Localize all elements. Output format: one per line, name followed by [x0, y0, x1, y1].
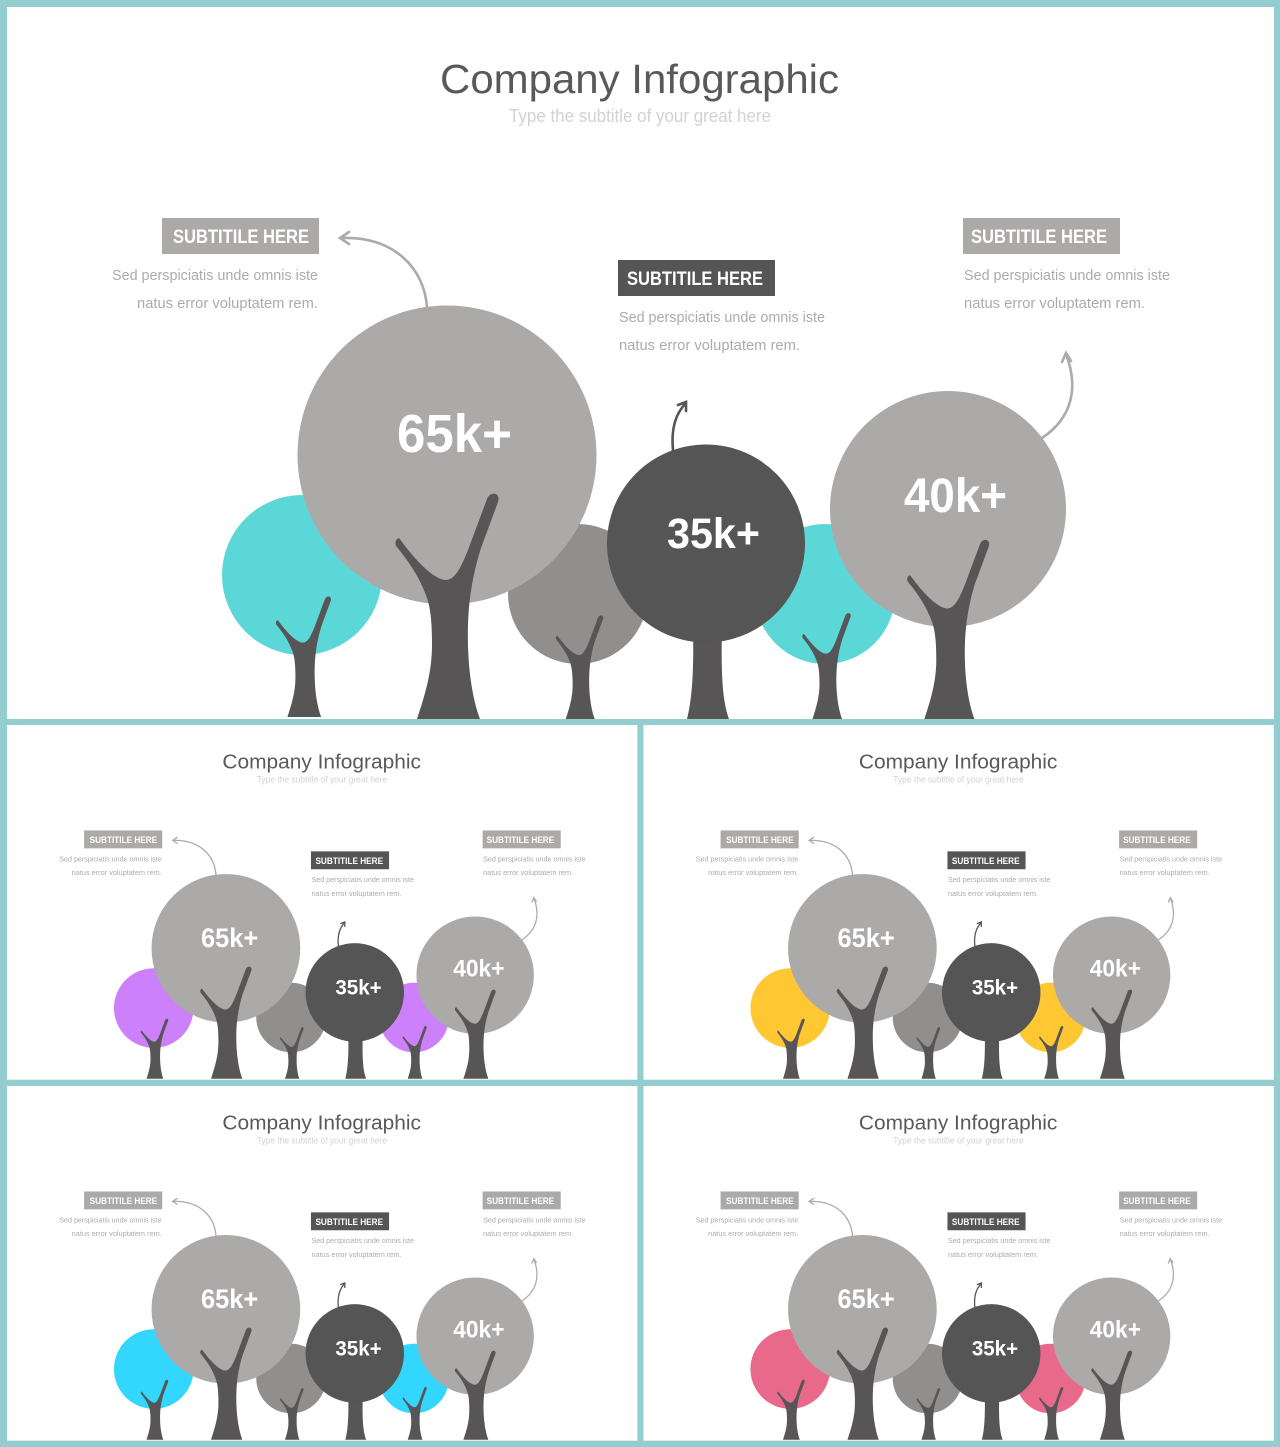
tree: dark 35k: 35k+	[972, 1337, 1018, 1361]
subtitle: Type the subtitle of your great here	[257, 775, 387, 785]
text block: right: Sed perspiciatis unde omnis iste	[1120, 1215, 1222, 1224]
arrow: right	[1042, 353, 1072, 438]
label box: left: SUBTITILE HERE	[726, 835, 794, 846]
text block: right: natus error voluptatem rem.	[483, 1229, 573, 1238]
label box: left	[84, 1191, 162, 1209]
panel: large teal slide	[7, 7, 1274, 719]
label box: right: SUBTITILE HERE	[1123, 1196, 1191, 1207]
arrow: left	[340, 232, 427, 307]
subtitle: Type the subtitle of your great here	[509, 106, 771, 126]
tree: pink small right	[1016, 1344, 1085, 1440]
subtitle: Type the subtitle of your great here	[893, 1136, 1024, 1146]
arrow: right	[1158, 1259, 1173, 1301]
label box: left: SUBTITILE HERE	[173, 227, 309, 248]
tree: dark 35k	[607, 444, 805, 719]
text block: left	[112, 267, 318, 312]
tree: dark 35k	[306, 943, 404, 1079]
text block: center: natus error voluptatem rem.	[948, 889, 1038, 898]
text block: right	[1120, 854, 1222, 877]
tree: grey small	[508, 524, 648, 719]
text block: center	[311, 875, 414, 898]
label box: right	[1119, 1191, 1197, 1209]
text block: left: Sed perspiciatis unde omnis iste	[59, 854, 162, 863]
label box: left: SUBTITILE HERE	[90, 1196, 157, 1207]
arrow: left	[173, 1198, 216, 1236]
text block: left	[696, 854, 798, 877]
tree: dark 35k: 35k+	[335, 1337, 382, 1361]
panel: yellow slide	[643, 725, 1274, 1080]
label box: right	[483, 1191, 561, 1209]
arrow: right	[1158, 898, 1173, 940]
label box: center	[618, 260, 775, 296]
text block: right: Sed perspiciatis unde omnis iste	[483, 854, 586, 863]
label box: center: SUBTITILE HERE	[952, 856, 1020, 867]
text block: left: Sed perspiciatis unde omnis iste	[59, 1215, 162, 1224]
text block: center: Sed perspiciatis unde omnis iste	[619, 309, 825, 326]
tree: 40k: 40k+	[1090, 1317, 1141, 1344]
label box: right: SUBTITILE HERE	[971, 227, 1107, 248]
tree: 40k: 40k+	[904, 470, 1007, 523]
tree: big 65k: 65k+	[838, 923, 895, 953]
tree: grey small	[893, 983, 962, 1079]
text block: center	[948, 875, 1050, 898]
arrow: center	[975, 922, 981, 946]
tree: grey small	[893, 1344, 962, 1440]
text block: center: natus error voluptatem rem.	[619, 337, 800, 354]
label box: center	[947, 1212, 1026, 1230]
panel: blue slide	[7, 1086, 637, 1441]
tree: 40k	[1053, 1278, 1170, 1440]
tree: big 65k: 65k+	[201, 1284, 258, 1314]
title: Company Infographic	[440, 56, 839, 102]
label box: center: SUBTITILE HERE	[315, 1217, 383, 1228]
tree: 40k: 40k+	[453, 1317, 505, 1344]
label box: left: SUBTITILE HERE	[90, 835, 157, 846]
text block: center	[619, 309, 825, 354]
label box: right	[483, 830, 561, 848]
title: Company Infographic	[859, 751, 1057, 773]
tree: grey small	[256, 983, 326, 1079]
label box: center	[311, 851, 389, 869]
text block: center: Sed perspiciatis unde omnis iste	[948, 1236, 1050, 1245]
tree: grey small	[256, 1344, 326, 1440]
tree: blue small right	[379, 1344, 449, 1440]
label box: right: SUBTITILE HERE	[1123, 835, 1191, 846]
label box: center: SUBTITILE HERE	[627, 269, 763, 290]
arrow: left	[173, 837, 216, 875]
title: Company Infographic	[859, 1112, 1057, 1134]
subtitle: Type the subtitle of your great here	[893, 775, 1024, 785]
arrow: center	[673, 402, 686, 450]
tree: small purple left	[114, 968, 194, 1079]
text block: left: natus error voluptatem rem.	[708, 868, 798, 877]
tree: teal small right	[755, 524, 895, 719]
text block: left: natus error voluptatem rem.	[137, 295, 318, 312]
text block: right	[964, 267, 1170, 312]
label box: left	[84, 830, 162, 848]
arrow: left	[809, 1198, 852, 1236]
tree: small blue left	[114, 1329, 194, 1440]
label box: right	[963, 218, 1120, 254]
text block: right: natus error voluptatem rem.	[1120, 868, 1210, 877]
tree: big 65k: 65k+	[397, 404, 512, 464]
text block: right: natus error voluptatem rem.	[483, 868, 573, 877]
text block: right	[483, 1215, 586, 1238]
text block: left: natus error voluptatem rem.	[72, 1229, 162, 1238]
tree: 40k	[416, 917, 534, 1079]
text block: center	[948, 1236, 1050, 1259]
arrow: left	[809, 837, 852, 875]
text block: right: Sed perspiciatis unde omnis iste	[1120, 854, 1222, 863]
text block: left: natus error voluptatem rem.	[72, 868, 162, 877]
text block: right: Sed perspiciatis unde omnis iste	[483, 1215, 586, 1224]
text block: center: Sed perspiciatis unde omnis iste	[311, 1236, 414, 1245]
arrow: center	[975, 1283, 981, 1307]
tree: big 65k	[298, 306, 596, 719]
label box: left: SUBTITILE HERE	[726, 1196, 794, 1207]
text block: right: natus error voluptatem rem.	[1120, 1229, 1210, 1238]
tree: yellow small right	[1016, 983, 1085, 1079]
tree: big 65k	[788, 874, 937, 1079]
arrow: right	[522, 1259, 537, 1301]
text block: left: Sed perspiciatis unde omnis iste	[112, 267, 318, 284]
text block: left: Sed perspiciatis unde omnis iste	[696, 1215, 798, 1224]
tree: big 65k	[152, 1235, 300, 1440]
tree: small yellow left	[750, 968, 830, 1079]
tree: big 65k	[152, 874, 300, 1079]
tree: dark 35k: 35k+	[335, 976, 382, 1000]
text block: right	[483, 854, 586, 877]
text block: center: natus error voluptatem rem.	[311, 1250, 402, 1259]
panel: pink slide	[643, 1086, 1274, 1441]
subtitle: Type the subtitle of your great here	[257, 1136, 387, 1146]
label box: center: SUBTITILE HERE	[952, 1217, 1020, 1228]
label box: right	[1119, 830, 1197, 848]
label box: left	[162, 218, 319, 254]
tree: dark 35k	[942, 1304, 1040, 1440]
label box: left	[721, 830, 799, 848]
tree: dark 35k: 35k+	[972, 976, 1018, 1000]
arrow: center	[338, 1283, 345, 1307]
title: Company Infographic	[222, 1112, 421, 1134]
tree: 40k: 40k+	[453, 956, 505, 983]
tree: dark 35k: 35k+	[667, 510, 760, 558]
text block: right	[1120, 1215, 1222, 1238]
text block: left	[696, 1215, 798, 1238]
arrow: center	[338, 922, 345, 946]
text block: center	[311, 1236, 414, 1259]
tree: dark 35k	[942, 943, 1040, 1079]
tree: big 65k: 65k+	[201, 923, 258, 953]
text block: right: natus error voluptatem rem.	[964, 295, 1145, 312]
label box: left	[721, 1191, 799, 1209]
title: Company Infographic	[222, 751, 421, 773]
text block: center: Sed perspiciatis unde omnis iste	[311, 875, 414, 884]
tree: 40k	[830, 391, 1066, 719]
tree: 40k	[416, 1278, 534, 1440]
text block: left	[59, 1215, 162, 1238]
text block: right: Sed perspiciatis unde omnis iste	[964, 267, 1170, 284]
text block: center: Sed perspiciatis unde omnis iste	[948, 875, 1050, 884]
label box: right: SUBTITILE HERE	[487, 1196, 554, 1207]
arrow: right	[522, 898, 537, 940]
tree: big 65k: 65k+	[838, 1284, 895, 1314]
tree: 40k: 40k+	[1090, 956, 1141, 983]
text block: left	[59, 854, 162, 877]
label box: center: SUBTITILE HERE	[315, 856, 383, 867]
text block: left: natus error voluptatem rem.	[708, 1229, 798, 1238]
tree: 40k	[1053, 917, 1170, 1079]
text block: left: Sed perspiciatis unde omnis iste	[696, 854, 798, 863]
text block: center: natus error voluptatem rem.	[311, 889, 402, 898]
tree: purple small right	[379, 983, 449, 1079]
tree: small teal left	[222, 495, 382, 717]
tree: dark 35k	[306, 1304, 404, 1440]
tree: big 65k	[788, 1235, 937, 1440]
text block: center: natus error voluptatem rem.	[948, 1250, 1038, 1259]
label box: center	[947, 851, 1026, 869]
panel: purple slide	[7, 725, 637, 1080]
label box: right: SUBTITILE HERE	[487, 835, 554, 846]
label box: center	[311, 1212, 389, 1230]
tree: small pink left	[750, 1329, 830, 1440]
